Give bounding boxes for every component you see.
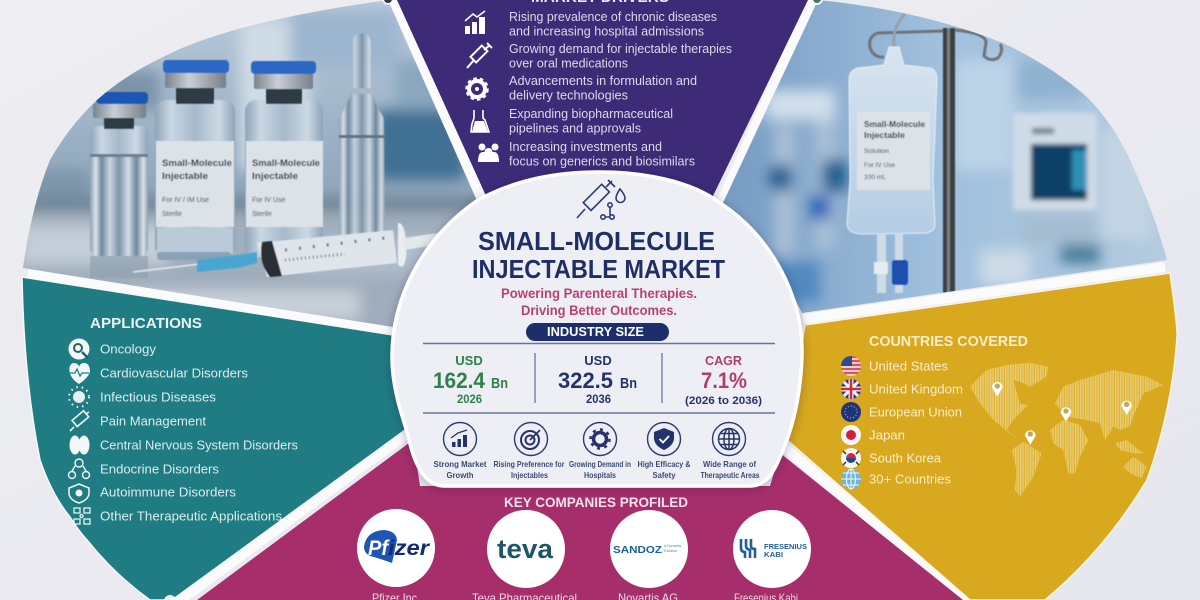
logo: Fresenius Kabi xyxy=(733,510,811,600)
feature: growing demand: Hospitals xyxy=(584,470,616,480)
icon: EU flag xyxy=(841,402,861,422)
list: countries: United Kingdom xyxy=(869,382,963,396)
driver 3: Advancements in formulation and xyxy=(509,74,697,88)
applications heading: APPLICATIONS xyxy=(90,316,202,332)
feature: rising preference xyxy=(494,422,565,480)
feature: therapeutic areas xyxy=(700,422,760,480)
syringe xyxy=(133,223,447,277)
icon: US flag xyxy=(841,356,861,376)
IV bag: Injectable xyxy=(864,130,905,140)
icon: growth chart xyxy=(465,11,485,34)
feature: efficacy and safety: High Efficacy & xyxy=(638,459,690,469)
stat: 2026 size: USD xyxy=(455,353,483,368)
panel: key companies xyxy=(197,440,963,600)
icon: oncology xyxy=(68,338,90,360)
icon: Japan flag xyxy=(841,425,861,445)
vial: labelled IV / IM xyxy=(155,60,235,260)
driver 4: pipelines and approvals xyxy=(509,122,641,136)
icon: shield xyxy=(69,484,89,503)
icon: syringe xyxy=(467,43,492,68)
feature: rising preference: Rising Preference for xyxy=(494,459,565,469)
vial: labelled IV: For IV Use xyxy=(252,197,286,204)
logo: Fresenius Kabi: FRESENIUS xyxy=(764,542,807,551)
stat: 2036 size: 322.5 xyxy=(558,368,613,393)
list: countries: European Union xyxy=(869,404,962,420)
feature: strong market growth: Growth xyxy=(446,470,474,480)
list: applications: Infectious Diseases xyxy=(100,390,217,404)
stat: CAGR: CAGR xyxy=(705,353,743,368)
logo: Pfizer: Pf xyxy=(368,537,390,560)
industry size pill xyxy=(526,323,669,341)
feature: efficacy and safety: Safety xyxy=(652,470,676,480)
vial: labelled IV / IM: Small-Molecule xyxy=(162,158,232,169)
driver 2: Growing demand for injectable therapies xyxy=(509,42,732,56)
feature: therapeutic areas: Therapeutic Areas xyxy=(700,470,760,480)
list: applications: Cardiovascular Disorders xyxy=(100,366,248,380)
logo: Sandoz: Division xyxy=(664,549,677,553)
vial: labelled IV: Small-Molecule xyxy=(252,158,320,169)
driver 2 xyxy=(509,42,732,70)
vial: left small xyxy=(90,92,148,278)
driver 4: Expanding biopharmaceutical xyxy=(509,107,673,121)
panel: centre market summary xyxy=(392,172,802,486)
logo: Pfizer xyxy=(357,509,435,600)
map pins xyxy=(992,382,1132,445)
list: countries: United States xyxy=(869,358,949,374)
icon: virus xyxy=(69,387,89,407)
icon: flask xyxy=(471,110,489,132)
key companies heading: KEY COMPANIES PROFILED xyxy=(504,494,688,510)
IV bag: Small-Molecule xyxy=(864,119,925,129)
feature: efficacy and safety xyxy=(638,422,690,480)
corner dot: top right xyxy=(812,0,822,4)
countries heading: COUNTRIES COVERED xyxy=(869,334,1028,350)
feature: rising preference: Injectables xyxy=(511,470,548,480)
world map xyxy=(970,363,1163,497)
feature: therapeutic areas: Wide Range of xyxy=(703,459,756,469)
feature: growing demand xyxy=(569,422,631,480)
stat: CAGR: 7.1% xyxy=(701,368,747,393)
corner dot: bottom left xyxy=(164,595,176,600)
list: applications: Oncology xyxy=(100,342,157,356)
corner dot: top left xyxy=(383,0,393,4)
IV pole xyxy=(870,14,1002,293)
panel: countries covered xyxy=(787,273,1177,600)
IV bag: For IV Use xyxy=(864,162,895,169)
driver 1: and increasing hospital admissions xyxy=(509,24,704,38)
stat: CAGR: (2026 to 2036) xyxy=(685,395,762,407)
vial: labelled IV xyxy=(245,61,323,257)
stat: 2036 size: Bn xyxy=(620,376,637,392)
industry size pill: INDUSTRY SIZE xyxy=(547,325,644,339)
icon: pain syringe xyxy=(70,411,89,431)
stat: 2036 size xyxy=(558,353,637,406)
list: applications: Other Therapeutic Applications xyxy=(100,508,283,524)
icon: molecule xyxy=(68,459,90,478)
list: countries xyxy=(869,358,963,486)
logo: Sandoz: A Novartis xyxy=(664,544,681,548)
IV bag: 100 mL xyxy=(864,174,886,181)
list: countries: 30+ Countries xyxy=(869,472,951,486)
driver 1 xyxy=(509,10,717,38)
vial: labelled IV / IM: For IV / IM Use xyxy=(162,197,209,204)
list: applications: Endocrine Disorders xyxy=(100,462,219,476)
feature: strong market growth xyxy=(434,422,487,480)
list: applications: Central Nervous System Disorders xyxy=(100,438,298,452)
logo: Pfizer: izer xyxy=(388,537,431,560)
logo: Sandoz xyxy=(610,510,688,600)
IV bag xyxy=(847,47,937,293)
logo: Fresenius Kabi: KABI xyxy=(764,550,783,559)
stat: 2026 size: 2026 xyxy=(457,394,482,406)
panel: applications xyxy=(22,277,412,600)
tagline: Powering Parenteral Therapies. xyxy=(501,285,697,301)
driver 1: Rising prevalence of chronic diseases xyxy=(509,10,717,24)
stat: 2026 size: Bn xyxy=(491,376,508,392)
vial: labelled IV / IM: Injectable xyxy=(162,171,208,182)
stat: 2026 size: 162.4 xyxy=(433,368,486,393)
feature: strong market growth: Strong Market xyxy=(434,459,487,469)
stat: 2026 size xyxy=(433,353,508,406)
driver 5: focus on generics and biosimilars xyxy=(509,154,695,168)
IV bag: Solution xyxy=(864,148,889,155)
feature: growing demand: Growing Demand in xyxy=(569,459,631,469)
icon: brain xyxy=(70,436,90,454)
list: countries: Japan xyxy=(869,428,905,442)
logo: Teva xyxy=(472,510,577,600)
title: INJECTABLE MARKET xyxy=(472,254,725,284)
vial: labelled IV: Injectable xyxy=(252,171,298,182)
panel: vial photo xyxy=(23,0,476,327)
tagline xyxy=(501,285,697,318)
logo: Sandoz: SANDOZ xyxy=(613,544,663,556)
vial: labelled IV: Sterile xyxy=(252,211,272,218)
list: countries: South Korea xyxy=(869,450,942,466)
icon: syringe and molecule xyxy=(577,180,625,219)
driver 4 xyxy=(509,107,673,136)
driver 3 xyxy=(509,74,697,102)
icon: people xyxy=(478,144,499,162)
icon: heart xyxy=(68,363,90,384)
icon: nodes xyxy=(74,508,90,524)
list: applications: Pain Management xyxy=(100,414,206,428)
driver 2: over oral medications xyxy=(509,56,628,70)
icon: globe xyxy=(841,469,861,489)
monitor xyxy=(1013,113,1097,210)
stat: 2036 size: 2036 xyxy=(586,394,611,406)
ampoule xyxy=(339,33,385,240)
list: applications: Autoimmune Disorders xyxy=(100,484,237,500)
stat: 2036 size: USD xyxy=(584,353,612,368)
icon: South Korea flag xyxy=(841,448,861,468)
logo: Teva: teva xyxy=(497,534,554,564)
title: SMALL-MOLECULE xyxy=(478,226,715,256)
driver 3: delivery technologies xyxy=(509,88,628,102)
driver 5: Increasing investments and xyxy=(509,140,662,154)
list: applications xyxy=(100,342,298,524)
tagline: Driving Better Outcomes. xyxy=(521,302,677,318)
title xyxy=(472,226,725,284)
icon: gear xyxy=(466,78,488,100)
panel: IV bag photo xyxy=(700,0,1180,320)
vial: labelled IV / IM: Sterile xyxy=(162,211,182,218)
icon: UK flag xyxy=(841,379,861,399)
stat: CAGR xyxy=(685,353,762,407)
panel: market drivers xyxy=(397,0,808,198)
driver 5 xyxy=(509,140,695,168)
